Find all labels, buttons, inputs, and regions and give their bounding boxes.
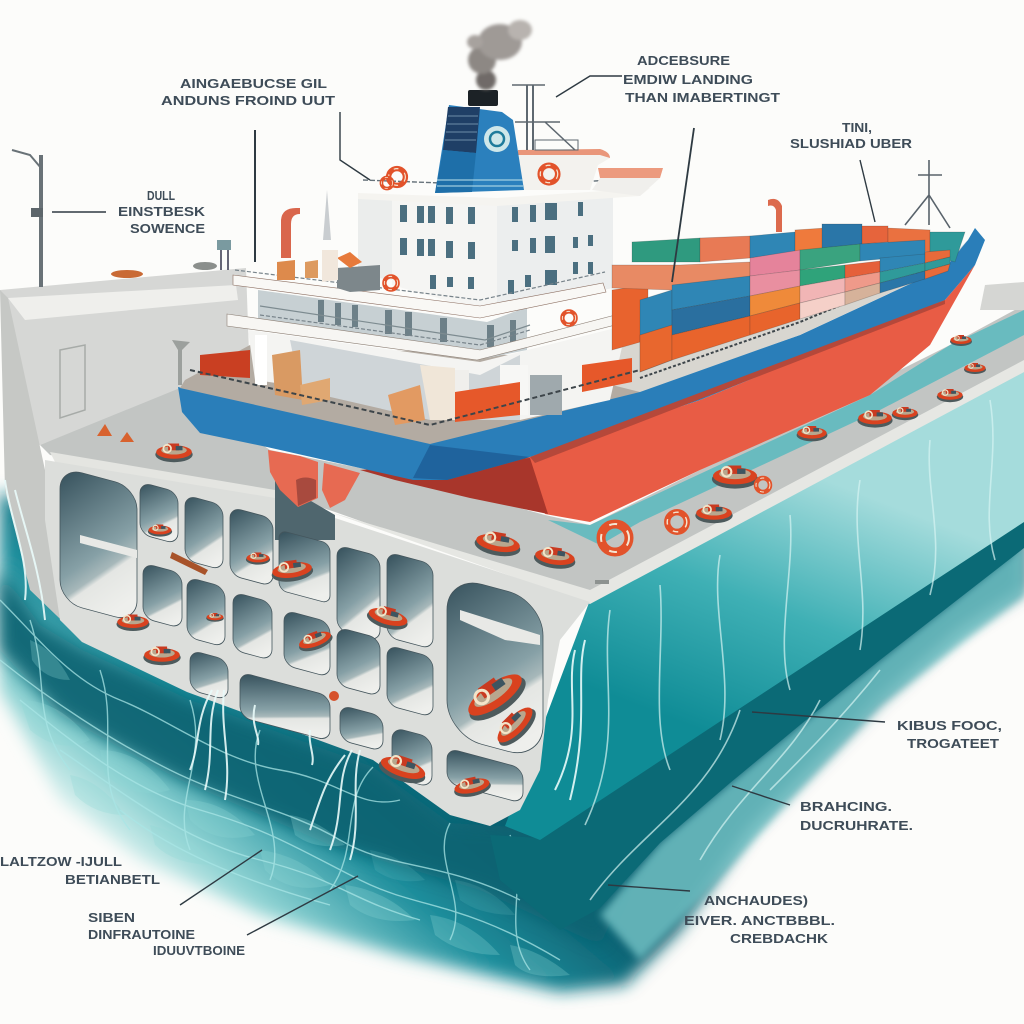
lifeboats in compartments [116, 524, 541, 800]
label: right 1: KIBUS FOOC, [897, 718, 1002, 733]
dock: left back wall and deck [0, 150, 1024, 640]
label: bottom left 2: SIBEN [88, 910, 135, 925]
lower superstructure [248, 325, 627, 420]
label: right 2: DUCRUHRATE. [800, 818, 913, 833]
label: right 3: CREBDACHK [730, 931, 829, 946]
rudders [268, 450, 318, 507]
label: top centre: THAN IMABERTINGT [625, 90, 780, 105]
label: right 3: ANCHAUDES) [704, 893, 808, 908]
bow mast [905, 160, 950, 228]
label: bottom left: BETIANBETL [65, 872, 160, 887]
label: right 2: BRAHCING. [800, 799, 892, 814]
radar mast [512, 85, 578, 150]
label: top right [790, 120, 913, 151]
label: right 3 [684, 893, 835, 946]
label: bottom left [0, 854, 160, 887]
hull: blue band [178, 228, 985, 480]
upper deck cargo [277, 260, 295, 280]
water ripple lines [0, 600, 560, 970]
funnel logo [484, 126, 510, 152]
upper white block [392, 195, 613, 312]
lamp post [12, 150, 43, 287]
label: bottom left 2: DINFRAUTOINE [88, 927, 195, 942]
shelves [80, 535, 540, 645]
deck A lip and rails [233, 275, 606, 318]
deck B lip [227, 312, 627, 360]
deck rail strip under containers [612, 240, 968, 392]
label: bottom left: LALTZOW -IJULL [0, 854, 122, 869]
sea: foreground water [0, 480, 1024, 992]
lower deck contents [180, 345, 640, 444]
stack vents [768, 199, 782, 232]
water gushing from hull [5, 480, 585, 860]
containers [612, 224, 965, 372]
water cells [20, 640, 570, 976]
smoke [467, 20, 532, 90]
label: top centre [623, 53, 780, 105]
label: right 1: TROGATEET [907, 736, 999, 751]
cutaway concrete front with compartments [5, 460, 590, 860]
life rings on ship [381, 165, 576, 325]
windows [400, 202, 593, 294]
label: top right: SLUSHIAD UBER [790, 136, 913, 151]
label: top right: TINI, [842, 120, 872, 135]
label: top left [161, 76, 335, 108]
bridge wing [518, 150, 610, 190]
deck lifeboats and buoys [97, 335, 986, 584]
label: left: EINSTBESK [118, 204, 206, 219]
label: top left: ANDUNS FROIND UUT [161, 93, 335, 108]
leader lines [52, 76, 885, 935]
label: left: SOWENCE [130, 221, 205, 236]
lower cargo boxes [200, 350, 250, 378]
label: right 3: EIVER. ANCTBBBL. [684, 913, 835, 928]
label: bottom left 2 [88, 910, 245, 958]
compartments [60, 467, 543, 803]
mid level windows [258, 290, 527, 358]
label: left [118, 188, 206, 236]
label: bottom left 2: IDUUVTBOINE [153, 943, 245, 958]
ship [178, 20, 985, 522]
wall streaks [585, 400, 995, 900]
label: top left: AINGAEBUCSE GIL [180, 76, 327, 91]
hull: red lower [413, 265, 975, 522]
right dock wall underwater [490, 372, 1024, 960]
exhaust pipe and mast on deck [281, 208, 300, 258]
label: right 1 [897, 718, 1002, 751]
label: right 2 [800, 799, 913, 833]
label: left: DULL [147, 188, 175, 203]
label: top centre: EMDIW LANDING [623, 72, 753, 87]
tower on dock [217, 240, 231, 270]
rooftop deck [358, 188, 650, 206]
funnel [435, 105, 524, 193]
label: top centre: ADCEBSURE [637, 53, 730, 68]
